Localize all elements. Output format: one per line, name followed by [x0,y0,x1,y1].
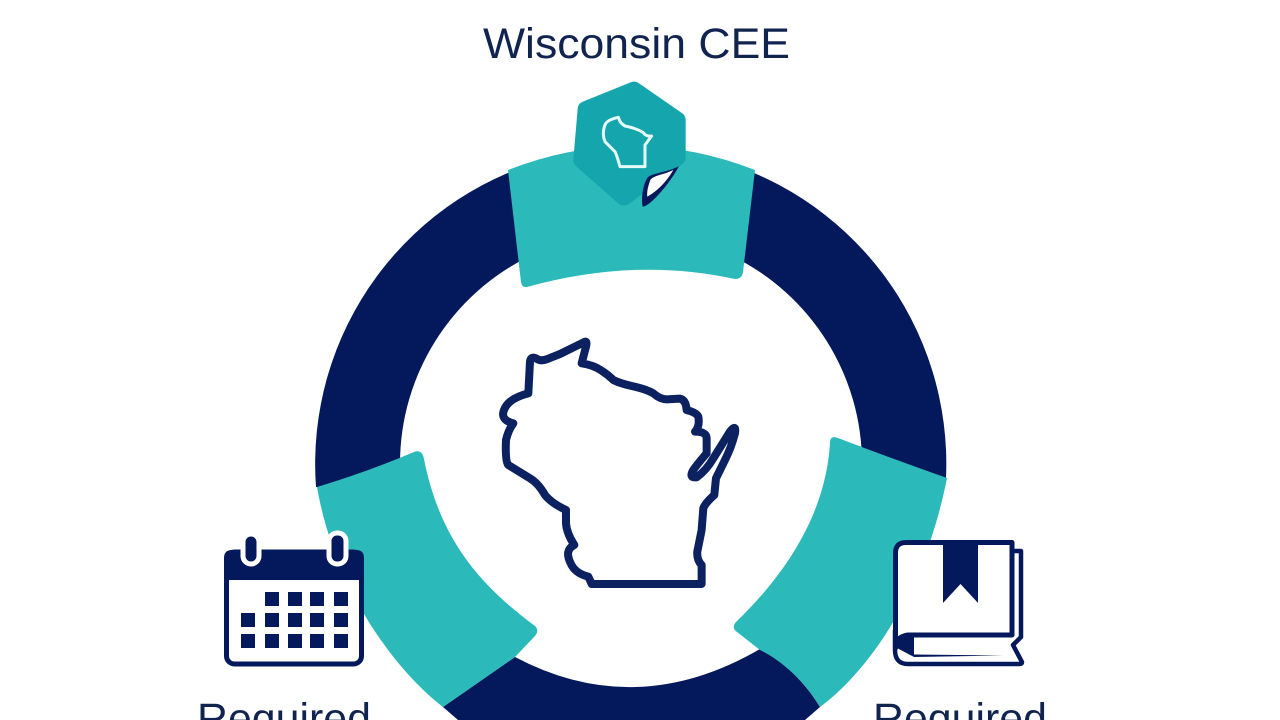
page curl [647,170,673,197]
calendar body [226,552,362,664]
book page line [914,654,1003,657]
icon: book [895,541,1022,664]
small state outline [603,117,652,167]
book front cover [896,542,1012,648]
calendar ring left [243,534,259,564]
navy ring: bottom arc [443,649,820,720]
navy ring: upper right arc [702,156,946,490]
calendar header [224,550,364,580]
calendar ring right [329,533,346,564]
panel: right teal segment [734,437,947,707]
navy ring: upper left arc [315,156,560,490]
book spine [897,634,914,657]
icon: calendar [224,533,364,664]
icon: Wisconsin badge [582,90,679,207]
title: Wisconsin CEE [483,20,790,68]
panel: top teal segment [508,146,755,287]
book back pages [895,551,1022,664]
panel: left teal segment [317,451,537,707]
badge hexagon [582,90,677,197]
page curl shadow [642,166,679,207]
calendar date grid [241,592,348,648]
bookmark [943,541,978,603]
icon: Wisconsin state outline [503,342,735,584]
